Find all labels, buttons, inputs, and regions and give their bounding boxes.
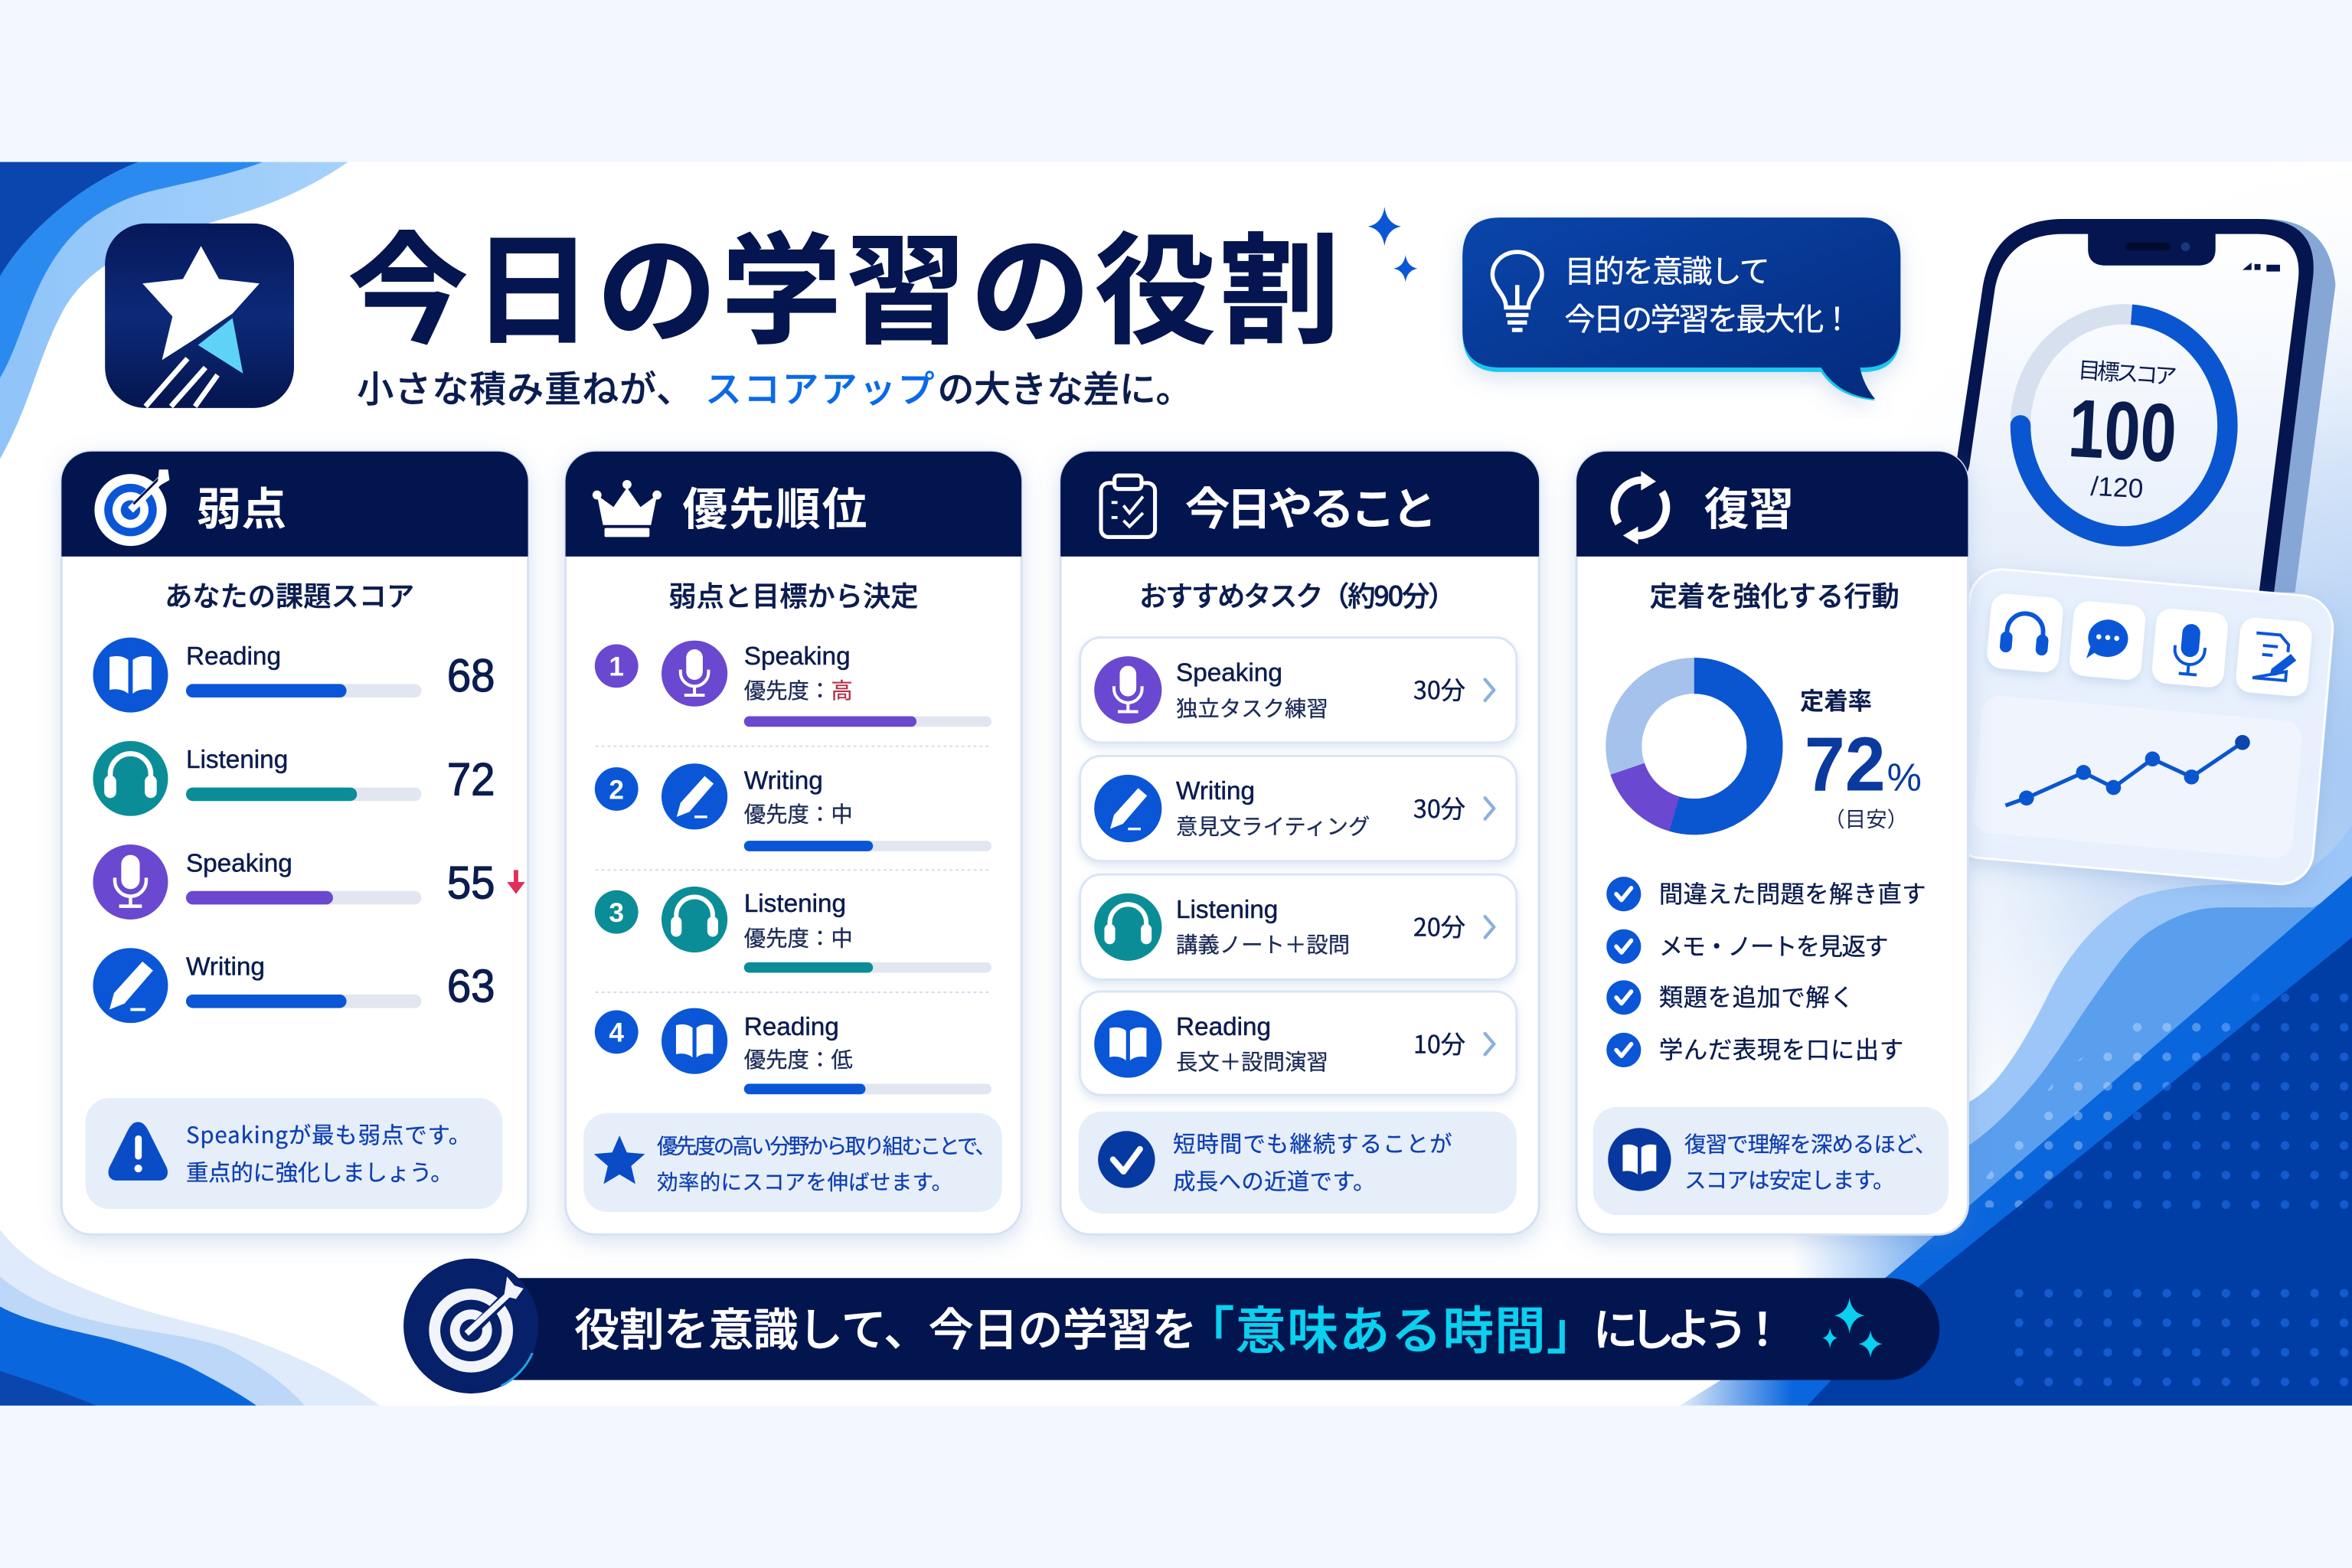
tile: microphone [2151,607,2230,688]
subtitle: の大きな差に。 [937,359,1193,413]
phone mockup [1935,219,2335,593]
note: review [1593,1107,1949,1215]
row 2: Writing [595,763,991,851]
task: Reading: Reading [1176,1013,1271,1041]
icon: refresh arrows [1614,471,1666,544]
subheading: あなたの課題スコア [165,575,414,615]
row 3: Listening: Listening [744,890,846,918]
row: Listening [93,741,495,816]
panel: 復習 [1576,452,1968,1234]
row 4: Reading: Reading [744,1013,839,1041]
icon: sparkles by title [1368,207,1417,282]
panel header [1060,452,1539,557]
banner text: にしよう！ [1593,1293,1785,1358]
subheading: 弱点と目標から決定 [668,575,918,615]
checklist: 類題を追加で解く [1659,979,1854,1014]
icon: crown [593,480,662,537]
row 4: Reading: 優先度：低 [744,1043,853,1074]
row 2: Writing: 2 [609,775,624,805]
row: Writing: 63 [447,960,495,1012]
gauge ring: target score [2011,314,2227,536]
task: Reading [1080,991,1517,1095]
icon: target [94,469,169,546]
task: Listening: Listening [1176,896,1278,924]
retention label: （目安） [1824,802,1908,833]
panel: 今日やること [1060,452,1539,1234]
retention label: 定着率 [1800,683,1872,717]
bottom banner [403,1259,1939,1393]
subtitle: スコアアップ [705,359,935,413]
icon: light bulb [1492,252,1542,330]
task: Speaking: 独立タスク練習 [1176,692,1328,724]
panel: 優先順位 [566,452,1021,1234]
retention label: % [1887,755,1922,799]
gauge text: 100 [2066,381,2179,479]
retention label [1800,683,1922,833]
note: weakest skill: 重点的に強化しましょう。 [186,1155,453,1187]
row: Reading [93,638,495,713]
decorative background: bottom right [1680,150,2352,1406]
subtitle: 小さな積み重ねが、 [357,359,693,413]
logo icon: star and rocket [105,224,294,408]
banner text: 役割を意識して、今日の学習を [574,1293,1197,1358]
note: consistency: 短時間でも継続することが [1173,1127,1452,1159]
task: Speaking: Speaking [1176,658,1282,687]
subheading: おすすめタスク（約90分） [1139,575,1455,615]
row 4: Reading: 4 [609,1018,624,1048]
row 1: Speaking [595,641,991,727]
tile: document and pen [2235,616,2313,697]
heading: 弱点 [197,473,286,538]
main banner background [0,162,2352,1406]
row: Speaking [93,844,525,920]
subtitle [357,359,1193,413]
decorative waves: bottom left [0,1230,380,1406]
row: Writing [93,948,495,1023]
panel header [1576,452,1968,557]
task: Writing: Writing [1176,777,1255,805]
checklist: 間違えた問題を解き直す [1659,875,1926,910]
heading: 復習 [1704,473,1794,538]
phone status icons [2243,263,2280,272]
task: Speaking: 30分 [1413,671,1465,707]
row 1: Speaking: Speaking [744,642,851,671]
row 3: Listening [595,887,991,973]
task: Listening: 20分 [1413,909,1465,944]
panel: 弱点 [61,452,528,1234]
note: weakest skill [86,1098,502,1209]
heading: 優先順位 [682,473,867,538]
row 3: Listening: 優先度：中 [744,921,853,952]
banner text [574,1290,1785,1364]
tile: headphones [1986,593,2064,674]
row 1: Speaking: 優先度：高 [744,674,853,705]
chart card [1971,694,2304,860]
callout text: 目的を意識して [1564,246,1770,291]
row 1: Speaking: 1 [609,652,624,682]
line chart [2005,735,2250,805]
task: Listening: 講義ノート＋設問 [1176,928,1350,959]
task: Writing [1080,756,1517,861]
gauge text: /120 [2090,472,2144,504]
task: Speaking [1080,638,1517,743]
banner text: 「意味ある時間」 [1184,1290,1598,1364]
checklist: 学んだ表現を口に出す [1659,1031,1903,1066]
row: Reading: 68 [447,649,495,701]
task: Writing: 30分 [1413,790,1465,825]
row 3: Listening: 3 [609,898,624,928]
note: priority [583,1113,1002,1212]
checklist: メモ・ノートを見返す [1659,928,1889,962]
row 4: Reading [595,1008,991,1094]
note: priority: 効率的にスコアを伸ばせます。 [657,1165,952,1196]
row: Reading: Reading [186,642,281,671]
note: priority: 優先度の高い分野から取り組むことで、 [657,1129,996,1160]
checklist [1606,875,1926,1067]
task: Writing: 意見文ライティング [1176,809,1370,841]
icon: target badge [403,1259,538,1393]
decorative waves: top left [0,162,348,459]
row: Listening: 72 [447,753,495,805]
note: weakest skill: Speakingが最も弱点です。 [186,1118,471,1150]
gauge text: 目標スコア [2077,352,2178,391]
title: 今日の学習の役割 [348,194,1340,368]
panel header [61,452,528,557]
panel header [566,452,1021,557]
callout text [1564,246,1853,339]
callout text: 今日の学習を最大化！ [1564,294,1853,339]
icon: cyan sparkles [1822,1298,1883,1357]
subheading: 定着を強化する行動 [1650,575,1900,615]
callout: speech bubble [1462,217,1900,400]
gauge text [2066,352,2179,504]
task: Listening [1080,874,1517,979]
glass panel: skill icons and line chart [1947,567,2335,887]
row: Listening: Listening [186,746,288,774]
task: Reading: 長文＋設問演習 [1176,1045,1328,1076]
heading: 今日やること [1185,473,1437,538]
note: consistency [1079,1112,1517,1214]
row: Speaking: 55 [447,857,495,909]
row 2: Writing: 優先度：中 [744,798,853,829]
row: Speaking: Speaking [186,849,292,877]
row: Writing: Writing [186,952,265,981]
donut chart [1624,676,1765,817]
row 2: Writing: Writing [744,767,823,795]
note: review: 復習で理解を深めるほど、 [1684,1128,1936,1159]
retention label: 72 [1805,722,1886,807]
icon: clipboard [1101,475,1155,537]
note: consistency: 成長への近道です。 [1173,1165,1376,1197]
note: review: スコアは安定します。 [1684,1164,1894,1195]
task: Reading: 10分 [1413,1025,1465,1060]
tile: chat bubble [2069,600,2147,681]
